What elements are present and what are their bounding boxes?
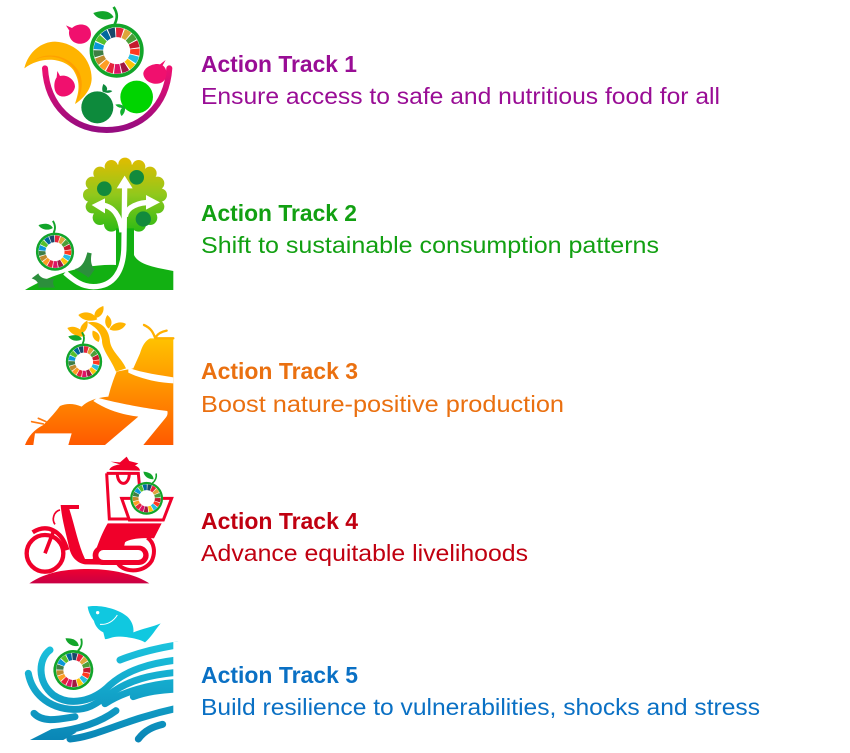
young tree <box>67 306 126 372</box>
scooter wheels and fender <box>27 528 154 572</box>
bright green apple <box>120 81 153 113</box>
icon: fish and waves <box>28 606 187 742</box>
ground and trunk <box>25 228 173 290</box>
SDG wheel <box>126 468 172 519</box>
grass strokes <box>32 418 46 424</box>
heading: action track 1: Action Track 1 <box>201 51 357 77</box>
seat pill <box>98 550 143 560</box>
icon: delivery scooter <box>27 457 172 583</box>
produce <box>109 457 140 471</box>
tree canopy <box>83 158 167 232</box>
apple cores <box>32 252 95 288</box>
SDG wheel <box>50 634 101 693</box>
SDG wheel <box>37 221 73 269</box>
waves <box>28 645 177 739</box>
scooter body <box>61 505 162 565</box>
bowl arc <box>45 68 169 130</box>
rear pill housing <box>93 546 149 565</box>
icon: terraced hills <box>25 306 173 445</box>
text: action track 3 description: Boost nature-positive production <box>201 391 564 417</box>
hill <box>29 569 149 583</box>
white roads <box>33 368 173 445</box>
text: action track 2 description: Shift to sustainable consumption patterns <box>201 232 659 258</box>
icon: tree and path <box>25 158 173 290</box>
hills <box>25 338 173 445</box>
text: action track 5 description: Build resilience to vulnerabilities, shocks and stress <box>201 694 760 720</box>
apples <box>97 170 151 227</box>
branching arrows <box>65 187 152 287</box>
heading: action track 3: Action Track 3 <box>201 358 358 384</box>
banana shading <box>33 55 82 101</box>
pears <box>54 24 167 97</box>
SDG wheel <box>91 7 142 76</box>
heading: action track 2: Action Track 2 <box>201 200 357 226</box>
text: action track 1 description: Ensure access to safe and nutritious food for all <box>201 83 720 109</box>
sprout <box>144 325 173 338</box>
fish <box>88 606 161 642</box>
SDG wheel <box>67 332 101 379</box>
text: action track 4 description: Advance equitable livelihoods <box>201 540 528 566</box>
heading: action track 5: Action Track 5 <box>201 662 358 688</box>
dark green apple <box>81 91 113 123</box>
banana <box>24 42 92 104</box>
icon: fruit bowl <box>24 7 169 130</box>
heading: action track 4: Action Track 4 <box>201 508 358 534</box>
shopping bag <box>107 473 172 520</box>
